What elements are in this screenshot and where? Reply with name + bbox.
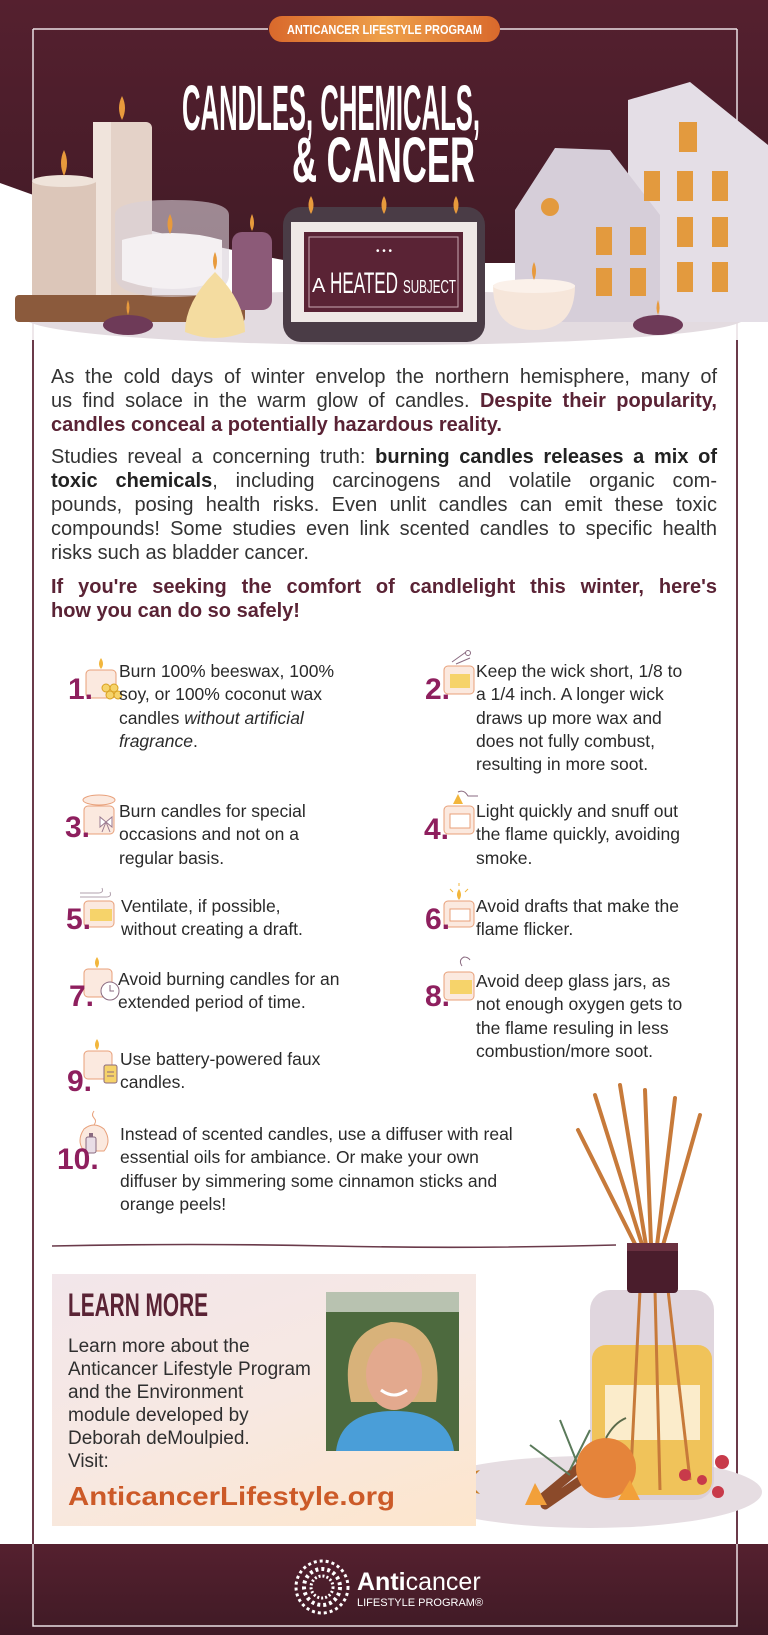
tip 9: candles. [120,1072,185,1092]
tip 5 [66,888,303,939]
tip 8: the flame resuling in less [476,1018,669,1038]
text block: and the Environment [68,1382,243,1403]
jar with label: SUBJECT [403,277,456,297]
tip 2: a 1/4 inch. A longer wick [476,684,664,704]
tip 3: regular basis. [119,848,224,868]
footer [0,1544,768,1635]
tip 5: Ventilate, if possible, [121,896,281,916]
url: AnticancerLifestyle.org [68,1481,395,1511]
learn more box [52,1274,476,1526]
tip 2: Keep the wick short, 1/8 to [476,661,682,681]
tip 4: smoke. [476,848,532,868]
candles left [15,96,272,338]
tip 1: soy, or 100% coconut wax [119,684,322,704]
intro paragraph 2: Studies reveal a concerning truth: burning candles releases a mix of [51,446,717,468]
tip 10: Instead of scented candles, use a diffuser with real [120,1124,513,1144]
tip 10 [57,1110,513,1214]
intro paragraph 3: If you're seeking the comfort of candlelight this winter, here's [51,576,717,598]
tip 10: 10. [57,1143,99,1176]
text block: Deborah deMoulpied. [68,1428,250,1449]
intro paragraph 1: As the cold days of winter envelop the northern hemisphere, many of [51,366,717,388]
icon: flickering candle [444,883,474,928]
pill label [269,16,500,42]
tip 5: 5. [66,903,91,936]
tip 4: Light quickly and snuff out [476,801,678,821]
tip 8: combustion/more soot. [476,1041,653,1061]
text block [68,1336,311,1472]
icon: candle with wind [80,888,114,928]
tip 7: extended period of time. [118,992,306,1012]
icon: oil diffuser [80,1110,108,1154]
icon: candle with clock [84,957,120,1000]
tip 8: not enough oxygen gets to [476,994,682,1014]
tip 4: 4. [424,813,449,846]
intro paragraph 2: risks such as bladder cancer. [51,542,309,564]
icon: candle tin with bow [82,794,116,834]
title: & CANCER [292,124,475,196]
intro paragraph 1: candles conceal a potentially hazardous reality. [51,414,502,436]
intro paragraph 3: how you can do so safely! [51,600,300,622]
tip 1: 1. [68,673,93,706]
photo [326,1292,459,1451]
tip 9 [67,1039,320,1098]
tip 8: 8. [425,980,450,1013]
tip 1 [68,658,334,751]
tip 6: 6. [425,903,450,936]
table ellipse [25,291,745,345]
heading: learn more: LEARN MORE [68,1287,208,1323]
intro paragraph 2: pounds, posing health risks. Even unlit candles can emit these toxic [51,494,717,516]
intro paragraph 2 [51,446,718,564]
tip 2 [425,650,682,774]
jar with label: • • • [376,246,393,257]
intro paragraph 1 [51,366,718,436]
tip 4 [424,790,680,868]
tip 5: without creating a draft. [121,919,303,939]
tip 6 [425,883,679,939]
jar with label [283,196,485,342]
tip 9: 9. [67,1065,92,1098]
tip 2: resulting in more soot. [476,754,648,774]
intro paragraph 3 [51,576,717,622]
tip 3: 3. [65,811,90,844]
tip 8: Avoid deep glass jars, as [476,971,670,991]
jar with label: A [312,275,326,297]
tip 6: Avoid drafts that make the [476,896,679,916]
text: orange peels! [120,1194,226,1214]
logo: LIFESTYLE PROGRAM® [357,1597,483,1609]
text block: Anticancer Lifestyle Program [68,1359,311,1380]
tip 1: candles without artificial [119,708,304,728]
tip 10: diffuser by simmering some cinnamon sticks and [120,1171,497,1191]
icon: battery candle [84,1039,118,1084]
tip 2: 2. [425,673,450,706]
tip 2: does not fully combust, [476,731,655,751]
intro paragraph 1: us find solace in the warm glow of candles. Despite their popularity, [51,390,717,412]
text block: Learn more about the [68,1336,250,1357]
icon: candle with snuffer [444,790,478,834]
tip 9: Use battery-powered faux [120,1049,320,1069]
logo: Anticancer [357,1568,481,1596]
header background and scene [0,0,768,345]
title [182,72,480,196]
tip 3: Burn candles for special [119,801,306,821]
intro paragraph 2: compounds! Some studies even link scented candles to specific health [51,518,717,540]
text block: Visit: [68,1451,109,1472]
tip 3 [65,794,306,868]
houses [493,82,768,335]
tip 3: occasions and not on a [119,824,299,844]
icon: candle with scissors [444,650,474,694]
tip 8 [425,956,682,1061]
tip 7: 7. [69,980,94,1013]
tip 7 [69,957,340,1013]
pill label: ANTICANCER LIFESTYLE PROGRAM [287,22,482,37]
intro paragraph 2: toxic chemicals, including carcinogens and volatile organic com- [51,470,717,492]
logo [294,1560,483,1614]
tip 1: fragrance. [119,731,198,751]
icon: candle with honeycomb [86,658,122,700]
icon: deep jar candle [444,956,474,1000]
tip 2: draws up more wax and [476,708,662,728]
tip 10: essential oils for ambiance. Or make your own [120,1147,479,1167]
tip 6: flame flicker. [476,919,573,939]
diffuser illustration [476,1083,762,1528]
text block: module developed by [68,1405,249,1426]
tip 7: Avoid burning candles for an [118,969,340,989]
tip 4: the flame quickly, avoiding [476,824,680,844]
tip 1: Burn 100% beeswax, 100% [119,661,334,681]
jar with label: HEATED [330,267,398,300]
